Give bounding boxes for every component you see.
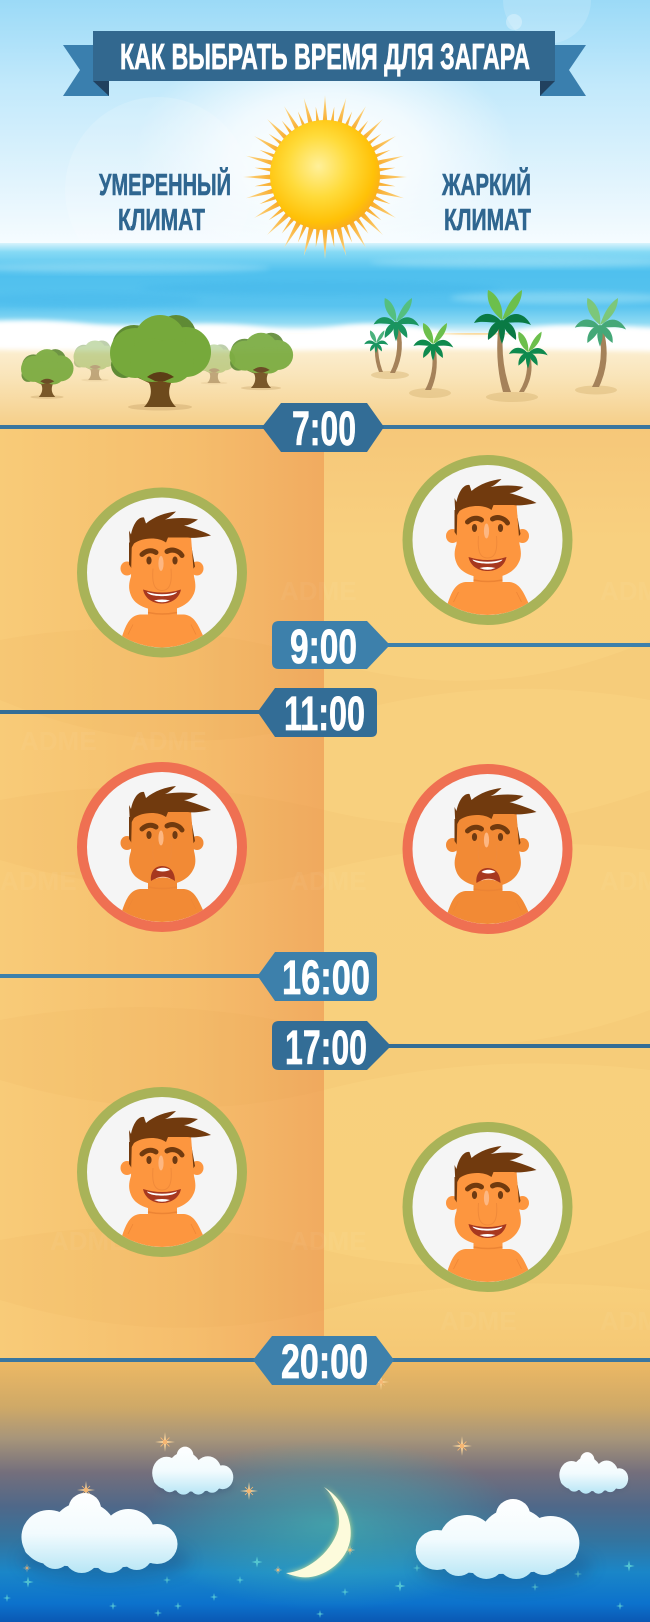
watermarks bbox=[0, 576, 650, 1336]
palm 6 bbox=[575, 298, 626, 394]
stars bbox=[3, 1374, 635, 1618]
ring bbox=[408, 1127, 568, 1287]
heading: hot climate: ЖАРКИЙ bbox=[441, 166, 531, 202]
ring bbox=[82, 492, 242, 652]
time marker 20:00 bbox=[0, 1336, 650, 1389]
panel: temperate climate sand column bbox=[0, 427, 324, 1372]
watermarks: ADME bbox=[280, 576, 357, 606]
panel: sky background bbox=[0, 0, 650, 283]
ring bbox=[82, 767, 242, 927]
heading: hot climate: КЛИМАТ bbox=[444, 202, 531, 237]
ring bbox=[82, 1092, 242, 1252]
time marker 16:00: 16:00 bbox=[282, 952, 370, 1005]
tree: faded right bbox=[193, 344, 235, 384]
watermarks: ADME bbox=[130, 726, 207, 756]
time marker 7:00: 7:00 bbox=[292, 403, 356, 456]
heading: temperate climate bbox=[99, 166, 231, 237]
watermarks: ADME bbox=[290, 1226, 367, 1256]
portrait: temperate evening, happy bbox=[82, 1092, 242, 1252]
ring bbox=[408, 769, 568, 929]
time marker 9:00: 9:00 bbox=[290, 621, 357, 674]
time marker 11:00 bbox=[0, 688, 377, 741]
tree: small left bbox=[21, 349, 74, 399]
trees: temperate climate bbox=[21, 315, 293, 410]
sun rays bbox=[239, 91, 411, 263]
tree: large centre bbox=[110, 315, 211, 410]
panel: beach with foam bbox=[0, 320, 650, 430]
time marker 9:00 bbox=[272, 621, 650, 674]
face bbox=[120, 512, 211, 652]
panel: sea bbox=[0, 243, 650, 333]
face bbox=[446, 788, 536, 929]
palm 4 bbox=[474, 290, 538, 402]
cloud: small left bbox=[152, 1447, 233, 1495]
watermarks: ADME bbox=[0, 866, 77, 896]
cloud: small right bbox=[559, 1452, 628, 1494]
heading: hot climate bbox=[441, 166, 531, 237]
face bbox=[120, 1111, 211, 1252]
portrait: hot midday, distressed bbox=[408, 769, 568, 929]
time marker 20:00: 20:00 bbox=[281, 1336, 368, 1389]
title ribbon bbox=[63, 31, 586, 96]
icon: crescent moon bbox=[274, 1487, 351, 1577]
time marker 17:00: 17:00 bbox=[285, 1022, 367, 1075]
heading: temperate climate: КЛИМАТ bbox=[118, 202, 205, 237]
portrait: hot evening, happy bbox=[408, 1127, 568, 1287]
time marker 16:00 bbox=[0, 952, 377, 1005]
sun disc bbox=[270, 120, 380, 230]
time marker 7:00 bbox=[0, 403, 650, 456]
tree: faded left bbox=[74, 340, 117, 382]
tree: small right bbox=[230, 333, 293, 390]
time marker 11:00: 11:00 bbox=[284, 688, 365, 741]
portrait: temperate morning, happy bbox=[82, 492, 242, 652]
panel: hot climate sand column bbox=[324, 427, 650, 1372]
ribbon left tail bbox=[63, 45, 109, 96]
watermarks: ADME bbox=[290, 866, 367, 896]
cloud: large right bbox=[416, 1499, 593, 1586]
palm 5 bbox=[509, 332, 548, 392]
panel: night sky bbox=[0, 1360, 650, 1622]
ribbon right tail bbox=[540, 45, 586, 96]
portrait: temperate midday, distressed bbox=[82, 767, 242, 927]
palm 2 bbox=[374, 298, 419, 373]
sand waves bbox=[0, 629, 650, 1328]
watermarks: ADME bbox=[20, 726, 97, 756]
sun bbox=[239, 91, 411, 263]
face bbox=[446, 1146, 536, 1287]
ring bbox=[408, 460, 568, 620]
palm 3 bbox=[409, 323, 453, 398]
portrait: hot morning, happy bbox=[408, 460, 568, 620]
cloud: large left bbox=[20, 1493, 190, 1580]
time marker 17:00 bbox=[272, 1021, 650, 1075]
watermarks: ADME bbox=[440, 1306, 517, 1336]
palm 1 bbox=[364, 330, 409, 379]
face bbox=[120, 786, 211, 927]
heading: temperate climate: УМЕРЕННЫЙ bbox=[99, 166, 231, 202]
face bbox=[446, 479, 536, 620]
palms: hot climate bbox=[364, 290, 626, 402]
watermarks: ADME bbox=[50, 1226, 127, 1256]
